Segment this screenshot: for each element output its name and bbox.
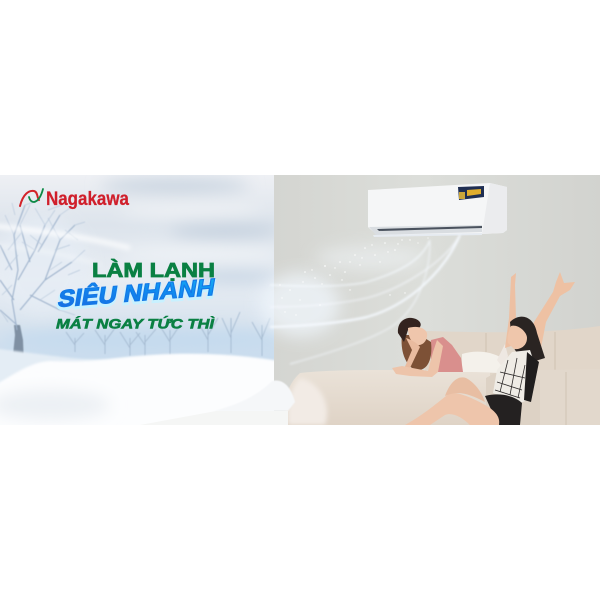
clouds <box>24 175 274 348</box>
heading: SIÊU NHANH: SIÊU NHANH <box>56 275 217 315</box>
headline <box>56 259 217 332</box>
woman lying <box>392 318 508 377</box>
heading: SIÊU NHANH: SIÊU NHANH <box>56 273 217 313</box>
banner illustration <box>0 175 600 425</box>
logo: Nagakawa <box>20 189 129 210</box>
sofa <box>286 326 600 425</box>
snow pile <box>274 380 295 411</box>
energy label <box>458 186 484 200</box>
logo wordmark: Nagakawa <box>46 189 129 210</box>
icon: logo swoosh <box>20 189 43 206</box>
cold air streaks <box>0 226 130 265</box>
sparkles <box>279 237 429 316</box>
air conditioner <box>368 183 507 237</box>
tree: large snowy tree <box>0 201 85 353</box>
white ledge <box>140 411 288 425</box>
snow hills <box>0 349 108 382</box>
woman with raised arms <box>405 272 575 425</box>
trees: distant row <box>66 312 270 356</box>
air flow <box>260 273 340 337</box>
panel: living room <box>140 175 600 425</box>
heading: LÀM LẠNH: LÀM LẠNH <box>92 259 215 282</box>
panel: winter scene <box>0 175 274 424</box>
heading: MÁT NGAY TỨC THÌ: MÁT NGAY TỨC THÌ <box>56 314 215 332</box>
